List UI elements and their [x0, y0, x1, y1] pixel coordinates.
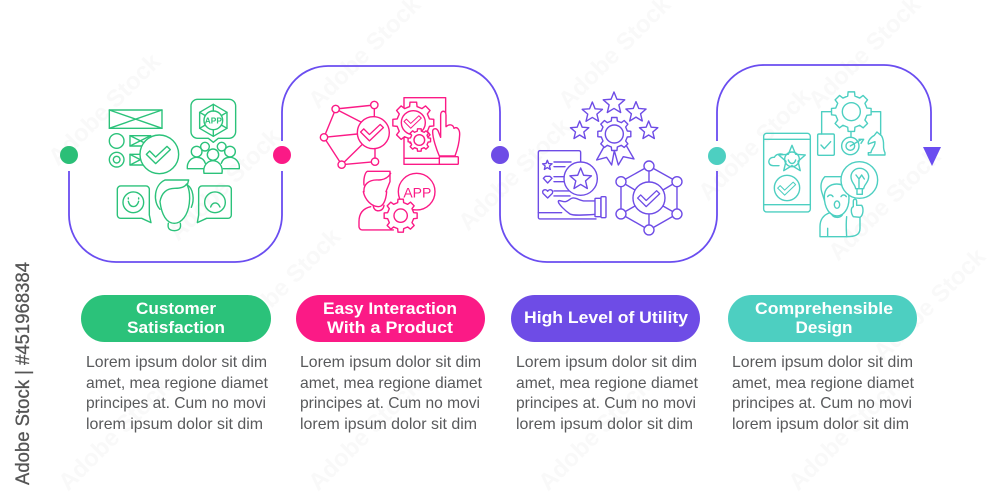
connector line [69, 65, 931, 262]
label pill: comprehensible design: Comprehensible [755, 299, 893, 318]
icon: customer satisfaction [109, 99, 239, 231]
body text: column 4: lorem ipsum dolor sit dim [732, 416, 909, 433]
body text: column 3: amet, mea regione diamet [516, 375, 699, 392]
stock credit: Adobe Stock | #451968384 [13, 262, 34, 485]
body text: column 3: principes at. Cum no movi [516, 395, 696, 412]
background watermark: Adobe Stock [533, 373, 657, 496]
body text: column 2: lorem ipsum dolor sit dim [300, 416, 477, 433]
body text: column 2: principes at. Cum no movi [300, 395, 480, 412]
body text: column 4: principes at. Cum no movi [732, 395, 912, 412]
body text: column 4: amet, mea regione diamet [732, 375, 915, 392]
body text: column 4 [732, 354, 915, 433]
body text: column 1: lorem ipsum dolor sit dim [86, 416, 263, 433]
label pill: customer satisfaction: Customer [136, 299, 216, 318]
background watermark: Adobe Stock [43, 48, 167, 171]
icon: high level of utility [538, 92, 682, 235]
label pill: customer satisfaction: Satisfaction [127, 318, 225, 337]
step marker dots [60, 146, 726, 165]
background watermark: Adobe Stock [693, 83, 817, 206]
background watermark: Adobe Stock [783, 373, 907, 496]
background watermark: Adobe Stock [823, 143, 947, 266]
label pill: easy interaction [296, 295, 485, 342]
body text: column 1: Lorem ipsum dolor sit dim [86, 354, 267, 371]
label pill: customer satisfaction [81, 295, 271, 342]
body text: column 3: lorem ipsum dolor sit dim [516, 416, 693, 433]
body text: column 3: Lorem ipsum dolor sit dim [516, 354, 697, 371]
label pill: comprehensible design [728, 295, 917, 342]
icon: customer satisfaction: APP [205, 115, 222, 125]
label pill: comprehensible design: Design [796, 318, 852, 337]
label pill: easy interaction: With a Product [327, 318, 453, 337]
background watermark: Adobe Stock [303, 373, 427, 496]
body text: column 2: amet, mea regione diamet [300, 375, 483, 392]
background watermark: Adobe Stock [453, 113, 577, 236]
background watermark: Adobe Stock [868, 243, 992, 366]
body text: column 1: principes at. Cum no movi [86, 395, 266, 412]
background watermark: Adobe Stock [53, 373, 177, 496]
body text: column 1: amet, mea regione diamet [86, 375, 269, 392]
icon: easy interaction with a product [320, 98, 460, 232]
arrow head [923, 147, 941, 166]
body text: column 2 [300, 354, 483, 433]
body text: column 3 [516, 354, 699, 433]
background watermark: Adobe Stock [223, 223, 347, 346]
label pill: high level of utility [511, 295, 700, 342]
body text: column 1 [86, 354, 269, 433]
label pill: high level of utility: High Level of Utility [524, 308, 689, 327]
body text: column 4: Lorem ipsum dolor sit dim [732, 354, 913, 371]
label pill: easy interaction: Easy Interaction [323, 299, 457, 318]
body text: column 2: Lorem ipsum dolor sit dim [300, 354, 481, 371]
icon: comprehensible design [764, 92, 885, 237]
icon: easy interaction with a product: APP [403, 184, 431, 200]
background watermark: Adobe Stock [163, 123, 287, 246]
